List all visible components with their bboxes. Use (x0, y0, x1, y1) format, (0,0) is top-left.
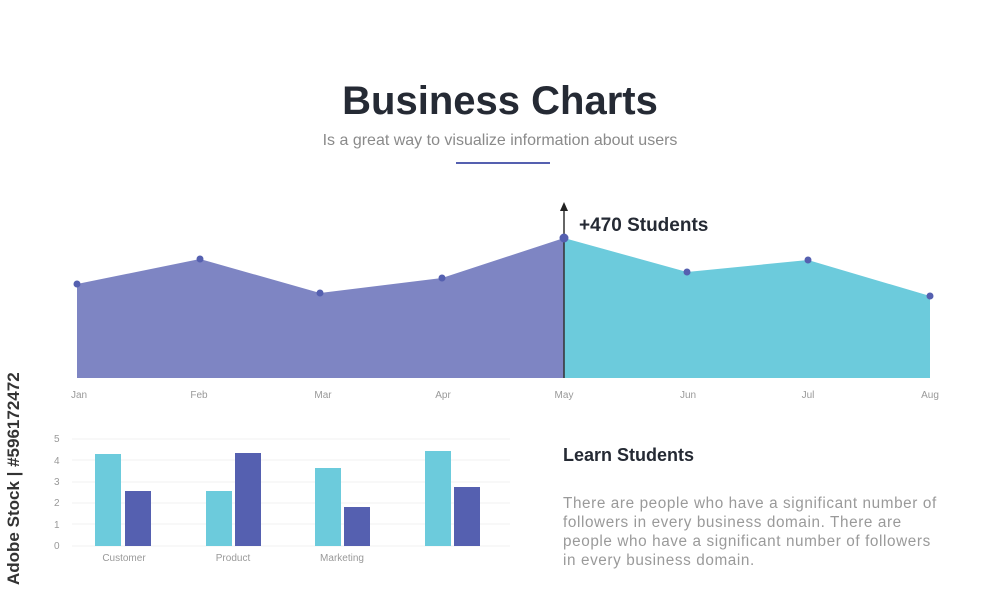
month labels: Feb (190, 390, 208, 401)
y axis labels (54, 434, 60, 552)
body text: in every business domain. (563, 552, 755, 569)
month labels: Jun (680, 390, 696, 401)
area: purple segment (77, 238, 564, 378)
y axis labels: 3 (54, 477, 60, 488)
watermark side text: Adobe Stock | #596172472 (4, 372, 23, 585)
area: cyan segment (564, 238, 930, 378)
month labels: Aug (921, 390, 939, 401)
month labels: Mar (314, 390, 332, 401)
heading: Learn Students: Learn Students (563, 445, 694, 465)
y axis labels: 5 (54, 434, 60, 445)
month labels: May (555, 390, 573, 401)
month labels: Apr (435, 390, 451, 401)
data points (74, 234, 934, 300)
body text: people who have a significant number of followers (563, 533, 931, 550)
month labels: Jul (802, 390, 814, 401)
month labels: Jan (71, 390, 87, 401)
month labels (71, 390, 939, 401)
category labels: Customer (102, 553, 146, 564)
category labels: Product (216, 553, 250, 564)
y axis labels: 1 (54, 520, 60, 531)
body text: followers in every business domain. There are (563, 514, 902, 531)
bars (95, 451, 480, 546)
category labels: Marketing (320, 553, 364, 564)
title underline (456, 162, 550, 164)
y axis labels: 4 (54, 456, 60, 467)
body text (563, 495, 937, 569)
title: Business Charts (342, 79, 658, 123)
y axis labels: 2 (54, 498, 60, 509)
category labels (102, 553, 364, 564)
arrow (560, 202, 568, 378)
area chart (71, 202, 939, 401)
bar chart (54, 434, 510, 564)
callout: +470 Students (579, 215, 708, 236)
subtitle: Is a great way to visualize information about users (323, 132, 677, 149)
y axis labels: 0 (54, 541, 60, 552)
body text: There are people who have a significant number of (563, 495, 937, 512)
